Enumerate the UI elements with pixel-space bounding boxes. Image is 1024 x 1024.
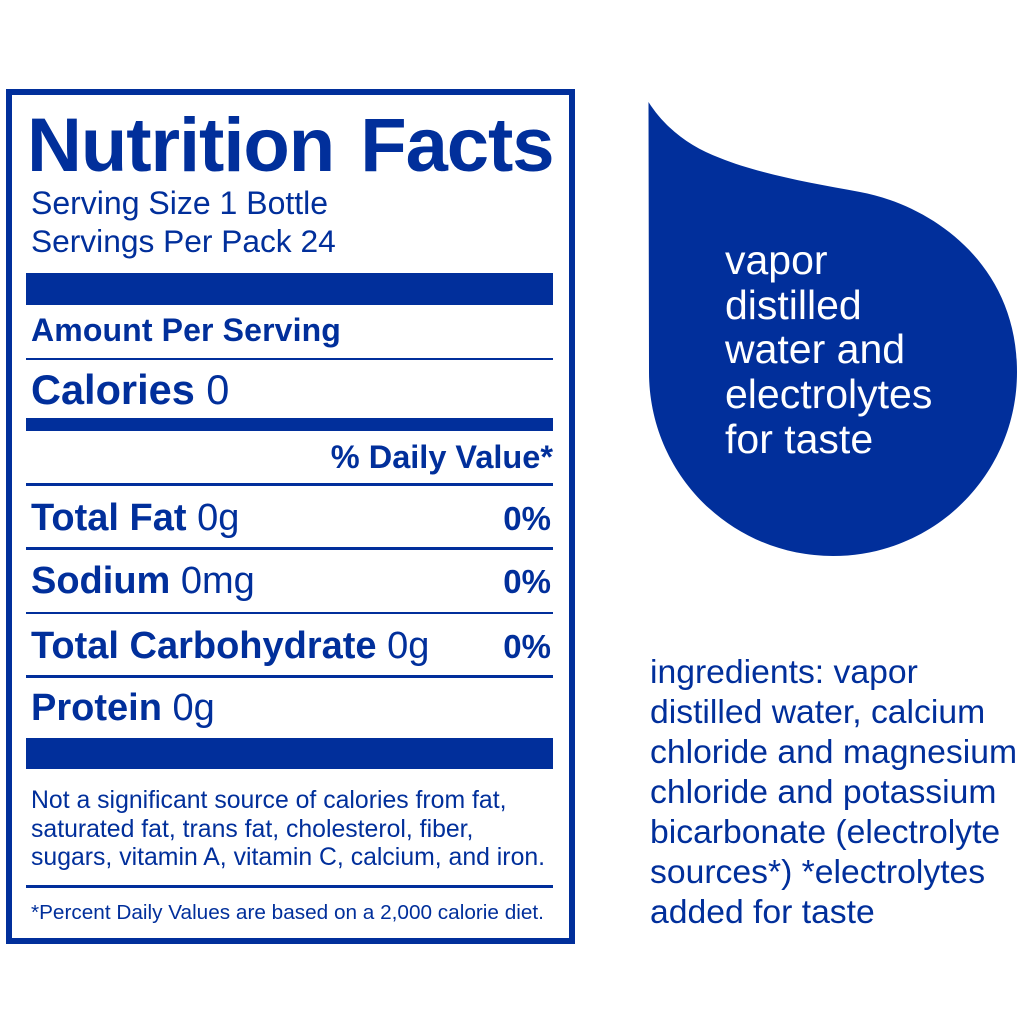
calories: Calories 0 bbox=[31, 366, 229, 413]
divider bbox=[26, 547, 553, 550]
icon: water drop bbox=[648, 102, 1017, 556]
footnote: not a significant source: Not a significant source of calories from fat, bbox=[31, 787, 506, 814]
total carbohydrate: Total Carbohydrate 0g bbox=[31, 625, 429, 667]
thick bar top bbox=[26, 273, 553, 305]
serving size: Serving Size 1 Bottle bbox=[31, 185, 328, 221]
footnote: not a significant source: saturated fat, trans fat, cholesterol, fiber, bbox=[31, 816, 473, 843]
panel: nutrition facts label bbox=[6, 89, 575, 944]
divider bbox=[26, 358, 553, 360]
ingredients text: ingredients: vapor distilled water, calcium chloride and magnesium chloride and potassium bicarbonate (electrolyte sources*) *electrolytes added for taste bbox=[650, 653, 1017, 931]
divider bbox=[26, 675, 553, 678]
footnote: not a significant source: sugars, vitamin A, vitamin C, calcium, and iron. bbox=[31, 844, 545, 871]
divider bbox=[26, 483, 553, 486]
protein: Protein 0g bbox=[31, 687, 215, 729]
footnote: percent daily values: *Percent Daily Values are based on a 2,000 calorie diet. bbox=[31, 901, 544, 924]
footnote: not a significant source bbox=[31, 787, 545, 871]
thick bar bottom bbox=[26, 738, 553, 769]
amount per serving: Amount Per Serving bbox=[31, 312, 341, 348]
title: Nutrition Facts bbox=[27, 103, 553, 188]
total fat percent: 0% bbox=[503, 500, 551, 537]
total fat: Total Fat 0g bbox=[31, 497, 239, 539]
drop text: vapor distilled water and electrolytes for taste bbox=[725, 237, 932, 462]
servings per pack: Servings Per Pack 24 bbox=[31, 223, 336, 259]
thick bar calories bbox=[26, 418, 553, 431]
divider bbox=[26, 885, 553, 888]
carbohydrate percent: 0% bbox=[503, 628, 551, 665]
divider bbox=[26, 612, 553, 614]
daily value header: % Daily Value* bbox=[331, 438, 553, 474]
sodium: Sodium 0mg bbox=[31, 560, 255, 602]
sodium percent: 0% bbox=[503, 563, 551, 600]
